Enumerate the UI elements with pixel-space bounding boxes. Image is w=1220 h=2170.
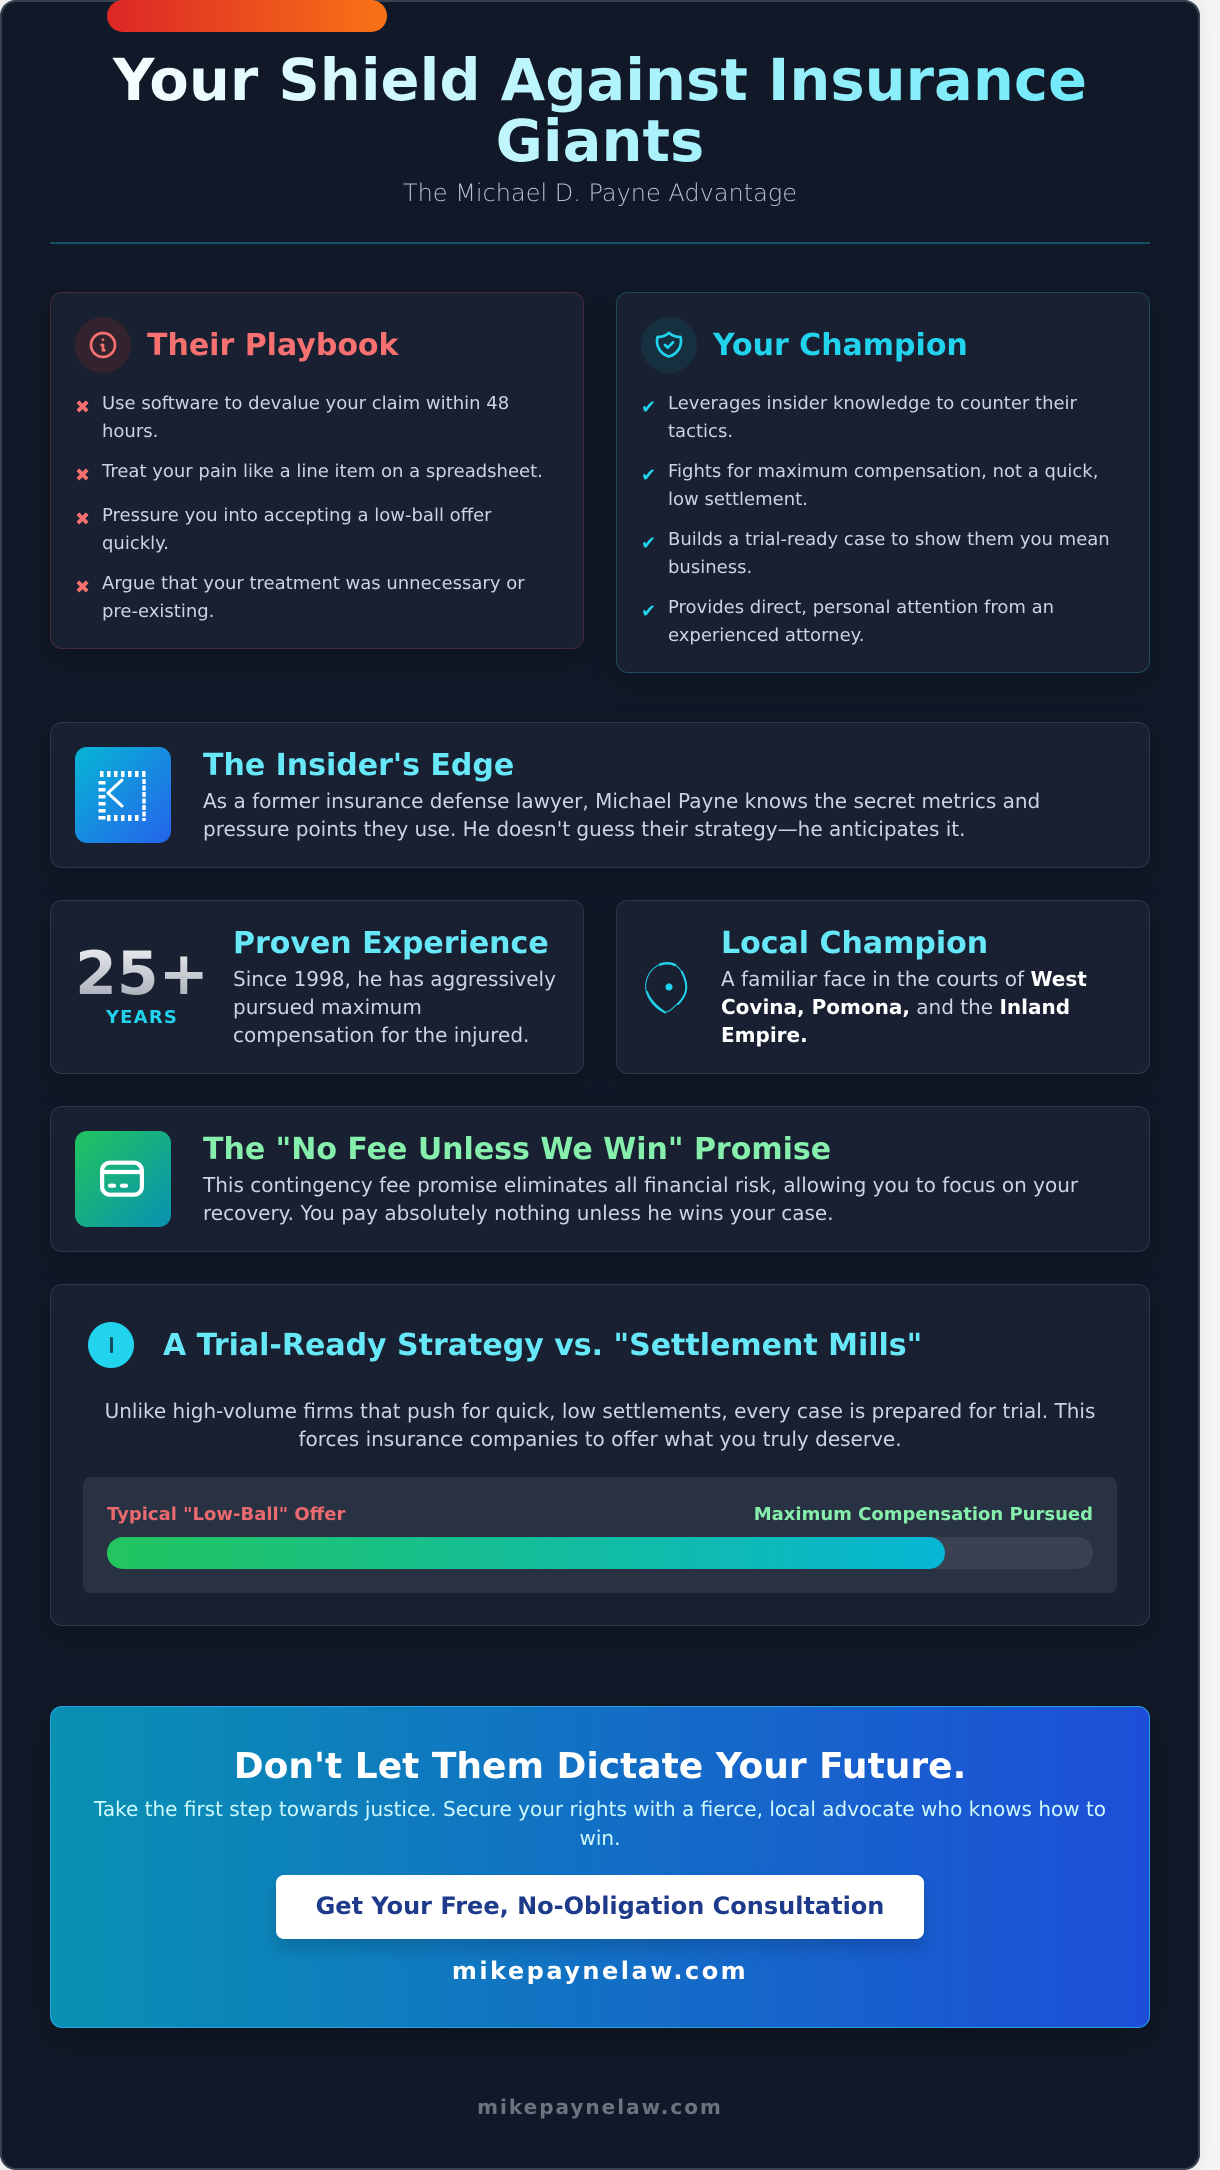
panel: their playbook: [50, 292, 584, 649]
body text: recovery. You pay absolutely nothing unless he wins your case.: [203, 1201, 834, 1225]
panel: trial-ready strategy: [50, 1284, 1150, 1626]
item: pre-existing.: [102, 601, 214, 622]
panel: the insider's edge: [50, 722, 1150, 868]
item: business.: [668, 557, 752, 578]
heading: The Insider's Edge: [203, 748, 514, 783]
body text: As a former insurance defense lawyer, Michael Payne knows the secret metrics and: [203, 789, 1040, 813]
item: Builds a trial-ready case to show them you mean: [668, 529, 1110, 550]
list: insurer tactics: [75, 393, 543, 622]
body text: This contingency fee promise eliminates all financial risk, allowing you to focus on your: [203, 1173, 1078, 1197]
stat: 25+ years: [75, 939, 209, 1028]
heading: their playbook: Their Playbook: [147, 328, 398, 363]
body text: Since 1998, he has aggressively: [233, 967, 556, 991]
item: ✔: [641, 533, 656, 554]
body text: Empire.: [721, 1023, 808, 1047]
body text: [105, 1399, 1095, 1451]
item: Argue that your treatment was unnecessary or: [102, 573, 525, 594]
list: champion strengths: [641, 393, 1110, 646]
item: Fights for maximum compensation, not a quick,: [668, 461, 1098, 482]
panel: local champion: [616, 900, 1150, 1074]
item: hours.: [102, 421, 158, 442]
item: low settlement.: [668, 489, 808, 510]
heading: Local Champion: [721, 926, 988, 961]
label: low-ball offer: Typical "Low-Ball" Offer: [107, 1504, 345, 1525]
panel: call to action: [50, 1706, 1150, 2028]
item: [75, 573, 525, 622]
item: ✖: [75, 509, 90, 530]
item: ✖: [75, 397, 90, 418]
item: quickly.: [102, 533, 169, 554]
item: ✔: [641, 465, 656, 486]
body text: pressure points they use. He doesn't guess their strategy—he anticipates it.: [203, 817, 966, 841]
top accent badge: [107, 0, 387, 32]
cta heading: Don't Let Them Dictate Your Future.: [234, 1746, 966, 1787]
cta button: Get Your Free, No-Obligation Consultation: [316, 1892, 884, 1920]
bar fill 85%: [107, 1537, 945, 1569]
item: ✖: [75, 465, 90, 486]
cta text: [94, 1797, 1106, 1850]
item: [641, 529, 1110, 578]
item: [641, 393, 1077, 442]
heading: A Trial-Ready Strategy vs. "Settlement Mills": [163, 1328, 922, 1363]
heading: Proven Experience: [233, 926, 549, 961]
cta text: Take the first step towards justice. Secure your rights with a fierce, local advocate who knows how to: [94, 1797, 1106, 1821]
heading: your champion: Your Champion: [713, 328, 968, 363]
body text: [203, 789, 1040, 841]
icon: credit card: [75, 1131, 171, 1227]
item: ✔: [641, 397, 656, 418]
comparison bar chart: [83, 1477, 1117, 1593]
title: Your Shield Against Insurance: [113, 47, 1087, 114]
panel: your champion: [616, 292, 1150, 673]
bar track: [107, 1537, 1093, 1569]
body text: [233, 967, 556, 1047]
heading: The "No Fee Unless We Win" Promise: [203, 1132, 831, 1167]
item: [75, 393, 509, 442]
panel: proven experience: [50, 900, 584, 1074]
body text: forces insurance companies to offer what you truly deserve.: [298, 1427, 902, 1451]
item: Use software to devalue your claim within 48: [102, 393, 509, 414]
body text: [202, 1173, 1078, 1225]
item: Treat your pain like a line item on a spreadsheet.: [102, 461, 543, 482]
item: ✖: [75, 577, 90, 598]
item: Provides direct, personal attention from an: [668, 597, 1054, 618]
item: experienced attorney.: [668, 625, 864, 646]
title: Giants: [496, 108, 704, 175]
icon: code frame: [75, 747, 171, 843]
item: [641, 461, 1098, 510]
item: ✔: [641, 601, 656, 622]
body text: Unlike high-volume firms that push for quick, low settlements, every case is prepared for trial. This: [105, 1399, 1095, 1423]
cta button: [276, 1875, 924, 1939]
footer: mikepaynelaw.com: [477, 2095, 723, 2119]
stat label: YEARS: [106, 1007, 178, 1028]
subtitle: The Michael D. Payne Advantage: [403, 179, 797, 207]
item: [641, 597, 1054, 646]
body text: A familiar face in the courts of West: [721, 967, 1087, 991]
panel: no fee promise: [50, 1106, 1150, 1252]
item: tactics.: [668, 421, 733, 442]
item: Pressure you into accepting a low-ball offer: [102, 505, 492, 526]
cta text: win.: [580, 1826, 620, 1850]
body text: Covina, Pomona, and the Inland: [721, 995, 1070, 1019]
title: [50, 50, 1150, 172]
item: Leverages insider knowledge to counter their: [668, 393, 1077, 414]
icon: info circle: [75, 317, 131, 373]
body text: pursued maximum: [233, 995, 422, 1019]
item: [75, 505, 492, 554]
icon: badge: [88, 1322, 134, 1368]
body text: compensation for the injured.: [233, 1023, 529, 1047]
body text: [721, 967, 1087, 1047]
label: maximum compensation: Maximum Compensation Pursued: [754, 1504, 1093, 1525]
icon: shield check: [641, 317, 697, 373]
icon: location pin: [645, 962, 688, 1014]
stat number: 25+: [75, 939, 209, 1009]
cta website: mikepaynelaw.com: [452, 1957, 748, 1985]
